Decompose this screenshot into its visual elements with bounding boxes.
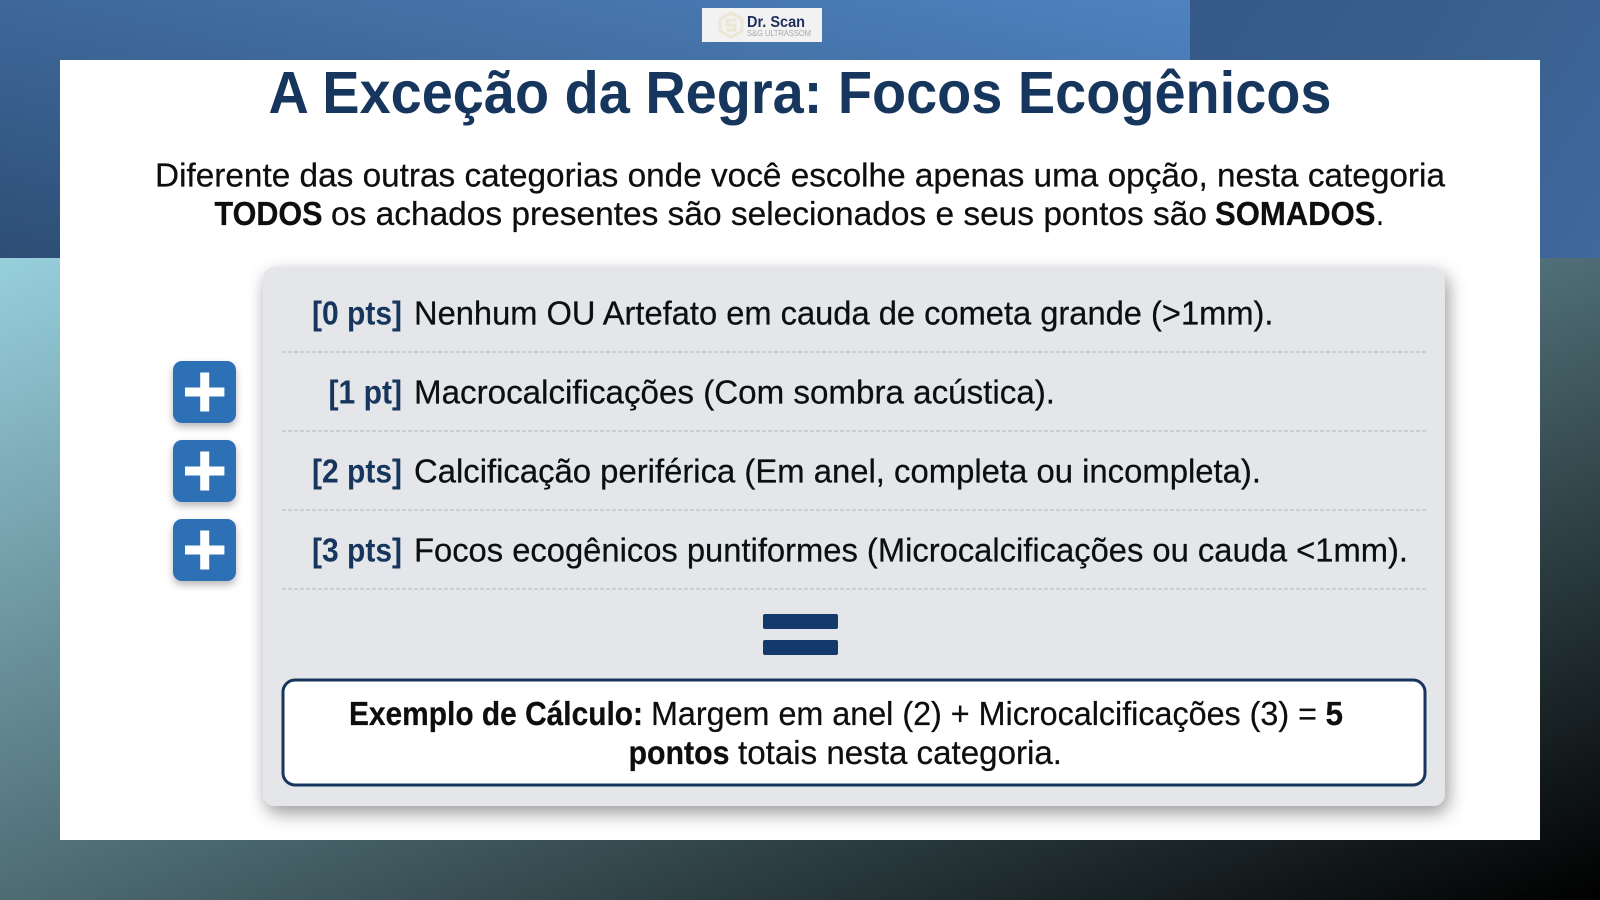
intro text: TODOS bbox=[214, 195, 322, 232]
row: 0 pts: [0 pts] bbox=[312, 294, 402, 332]
row: 3 pts: Focos ecogênicos puntiformes (Microcalcificações ou cauda <1mm). bbox=[414, 532, 1408, 568]
logo name: Dr. Scan bbox=[747, 14, 805, 31]
row: 2 pts: Calcificação periférica (Em anel, completa ou incompleta). bbox=[414, 452, 1261, 490]
intro text: . bbox=[1376, 195, 1384, 232]
background: top blue band bbox=[0, 0, 1600, 258]
icon: plus 1 bbox=[173, 361, 236, 423]
title: A Exceção da Regra: Focos Ecogênicos bbox=[268, 60, 1332, 126]
callout: calculation example: Exemplo de Cálculo: bbox=[349, 695, 643, 732]
callout: calculation example: 5 bbox=[1326, 695, 1343, 732]
callout: calculation example: pontos bbox=[628, 734, 730, 771]
row: 1 pt: Macrocalcificações (Com sombra acústica). bbox=[414, 374, 1055, 410]
callout: calculation example: totais nesta categoria. bbox=[738, 734, 1062, 771]
callout: calculation example bbox=[283, 680, 1425, 785]
row: 1 pt: [1 pt] bbox=[328, 374, 402, 410]
intro text: os achados presentes são selecionados e seus pontos são bbox=[331, 195, 1207, 232]
intro text: Diferente das outras categorias onde você escolhe apenas uma opção, nesta categoria bbox=[155, 156, 1446, 194]
row: 2 pts: [2 pts] bbox=[312, 452, 402, 490]
logo subtitle: S&G ULTRASSOM bbox=[747, 28, 811, 38]
icon: equals sign bbox=[763, 614, 838, 655]
icon: logo hexagon bbox=[720, 13, 742, 37]
icon: plus 3 bbox=[173, 519, 236, 581]
callout: calculation example: Margem em anel (2) + Microcalcificações (3) = bbox=[651, 695, 1317, 732]
intro text bbox=[155, 156, 1446, 232]
logo: Dr. Scan bbox=[702, 8, 822, 42]
row: 3 pts: [3 pts] bbox=[312, 532, 402, 568]
panel: scoring card bbox=[263, 267, 1445, 806]
intro text: SOMADOS bbox=[1215, 195, 1376, 232]
background: bottom teal to dark gradient bbox=[0, 258, 1600, 900]
row: 0 pts: Nenhum OU Artefato em cauda de cometa grande (>1mm). bbox=[414, 294, 1274, 332]
icon: plus 2 bbox=[173, 440, 236, 502]
